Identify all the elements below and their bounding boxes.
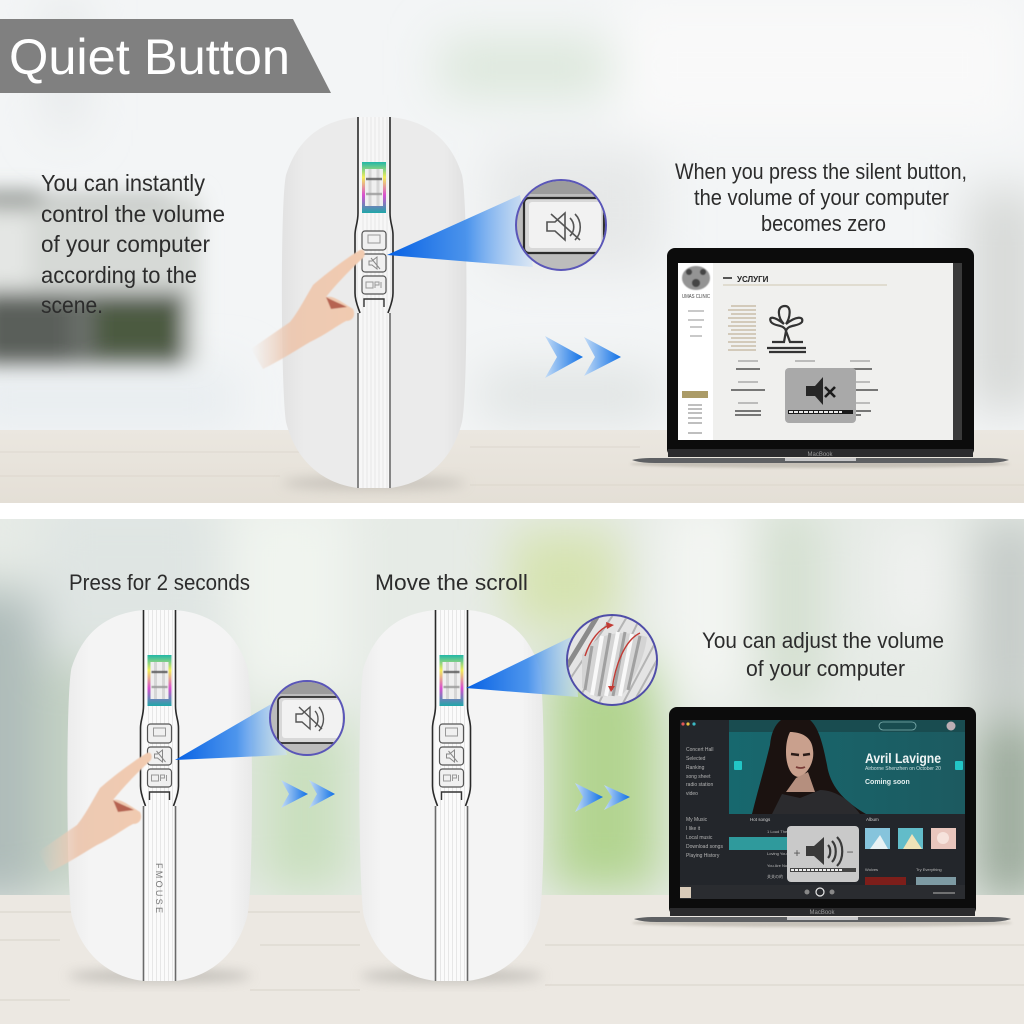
text: instant volume control: control the volume	[41, 201, 225, 227]
sidebar menu: My Music	[686, 817, 708, 823]
hero banner: Coming soon	[865, 779, 910, 786]
sidebar menu: song sheet	[686, 774, 711, 780]
arrows between mice	[281, 780, 335, 808]
text: instant volume control: according to the	[41, 262, 197, 288]
volume overlay: −	[846, 845, 854, 859]
song list: 关关の的	[767, 873, 783, 879]
sidebar menu: Concert Hall	[686, 747, 714, 753]
table top	[0, 430, 1024, 503]
album grid: Wolves	[865, 867, 878, 872]
hero banner: Airborne Shenzhen on October 20	[865, 766, 941, 772]
text: instant volume control: You can instantly	[41, 170, 205, 196]
sidebar menu: video	[686, 791, 698, 797]
text: adjust volume: of your computer	[746, 656, 905, 681]
volume overlay	[787, 826, 859, 882]
website content: УСЛУГИ	[737, 275, 769, 284]
sidebar menu: I like it	[686, 826, 701, 832]
song list: You Are Not	[767, 863, 789, 868]
text: instant volume control: scene.	[41, 292, 103, 318]
label: move the scroll: Move the scroll	[375, 570, 528, 595]
panel: quiet button scene	[0, 0, 1024, 503]
background: blurred room	[0, 0, 1024, 503]
text: adjust volume	[702, 628, 944, 681]
sidebar menu: Download songs	[686, 844, 723, 850]
sidebar menu: radio station	[686, 782, 713, 788]
plus and minus: +	[793, 846, 801, 860]
hand pressing mute button	[38, 753, 152, 872]
song list	[729, 817, 852, 879]
hero banner	[729, 715, 965, 814]
website content	[682, 266, 887, 433]
text: silent button explanation: the volume of your computer	[694, 185, 949, 210]
banner	[0, 19, 331, 93]
sidebar menu: Local music	[686, 835, 713, 841]
laptop: muted website	[630, 248, 1010, 468]
mouse with finger on mute button	[282, 117, 466, 489]
label: press for 2 seconds: Press for 2 seconds	[69, 570, 250, 595]
text: adjust volume: You can adjust the volume	[702, 628, 944, 653]
arrows to laptop	[545, 336, 621, 378]
song list: 1 Loud The W	[767, 829, 792, 834]
laptop brand label: MacBook	[807, 452, 834, 458]
text: instant volume control	[41, 170, 225, 318]
brand text: FMOUSE	[154, 863, 164, 913]
song list: Hot songs	[750, 817, 771, 822]
text: silent button explanation: becomes zero	[761, 211, 886, 236]
album grid: Try Everything	[916, 867, 942, 872]
player bar	[680, 885, 965, 899]
mute overlay	[785, 368, 856, 423]
laptop brand label: MacBook	[809, 910, 836, 916]
arrows to laptop	[575, 783, 630, 812]
sidebar menu: Selected	[686, 756, 706, 762]
website content: UMAS CLINIC	[682, 294, 710, 300]
laptop: music app	[632, 707, 1012, 927]
album grid	[865, 817, 956, 885]
sidebar menu	[681, 722, 723, 859]
callout beam and scroll wheel magnifier	[466, 612, 672, 705]
background: blurred greenery	[0, 500, 1024, 1024]
panel: adjust volume scene	[0, 500, 1024, 1024]
text: silent button explanation	[675, 159, 967, 236]
mouse with scroll wheel highlighted	[359, 610, 544, 982]
sidebar menu: Ranking	[686, 765, 705, 771]
text: instant volume control: of your computer	[41, 231, 210, 257]
sidebar menu: Playing History	[686, 853, 720, 859]
text: silent button explanation: When you press the silent button,	[675, 159, 967, 184]
mouse with FMOUSE branding	[67, 610, 252, 982]
hero banner: Avril Lavigne	[865, 750, 941, 766]
hand pressing mute button	[251, 250, 365, 369]
album grid: Album	[866, 817, 879, 822]
title: Quiet Button	[9, 29, 290, 85]
table top	[0, 895, 1024, 942]
callout beam and mute button magnifier	[387, 180, 610, 270]
song list: Loving You	[767, 851, 787, 856]
callout beam and mute button magnifier	[175, 680, 345, 760]
